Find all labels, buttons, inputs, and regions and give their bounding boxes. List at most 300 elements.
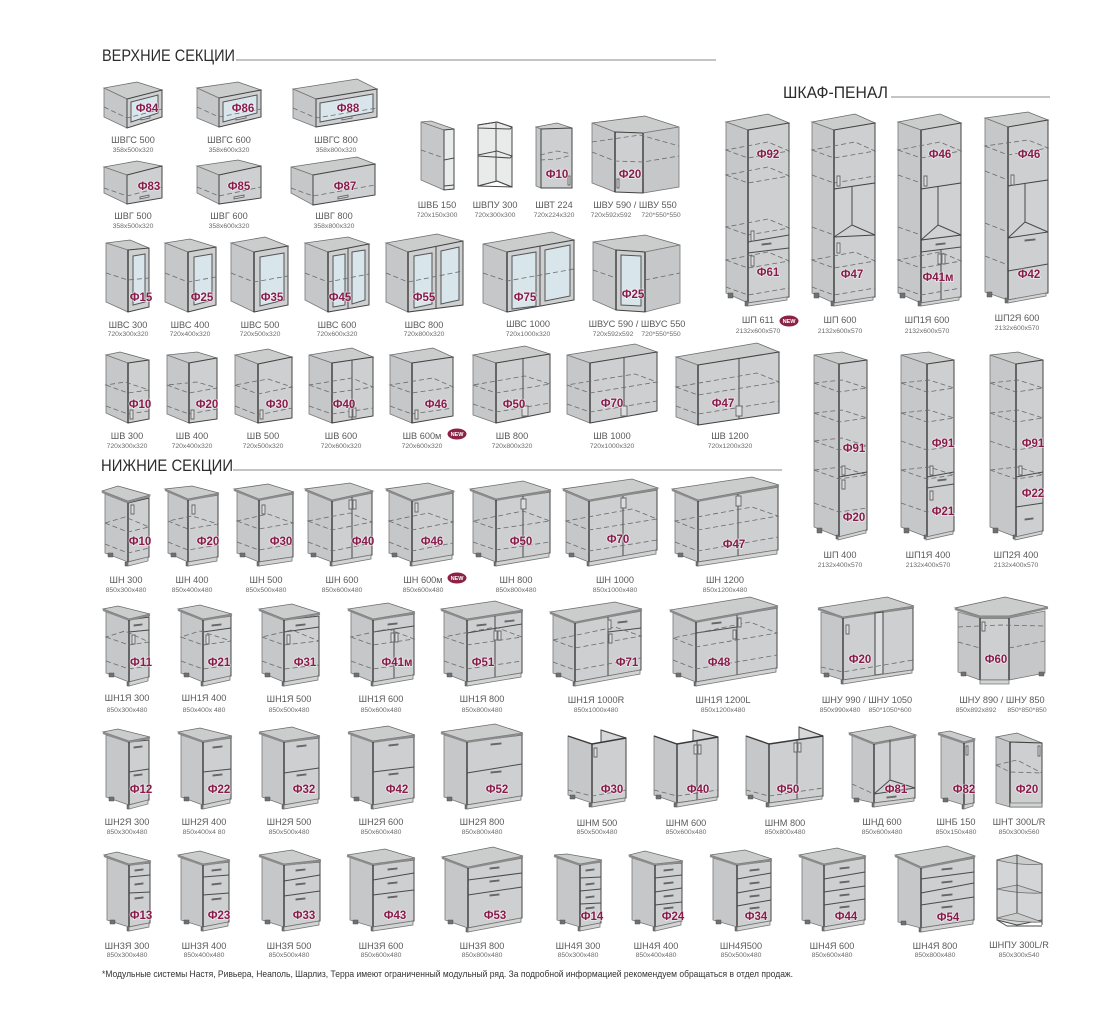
cabinet ШП2Я 600: Ф42 (1018, 269, 1040, 281)
cabinet ШН1Я 1200L: ШН1Я 1200L (696, 695, 750, 705)
cabinet ШВГС 800: ШВГС 800 (314, 135, 358, 145)
cabinet ШВС 1000: Ф75 (514, 292, 537, 304)
cabinet ШВПУ 300: ШВПУ 300 (473, 200, 517, 210)
cabinet ШВ 800: Ф50 (503, 399, 525, 411)
cabinet ШН 500: 850x500x480 (246, 587, 287, 594)
cabinet ШН 500: ШН 500 (250, 575, 282, 585)
cabinet ШВГ 600 (197, 160, 261, 230)
cabinet ШН 600м (386, 483, 454, 594)
cabinet ШН4Я 800: ШН4Я 800 (913, 941, 957, 951)
cabinet ШН1Я 600: ШН1Я 600 (359, 694, 403, 704)
cabinet ШН3Я 600: 850x600x480 (361, 952, 402, 959)
cabinet ШН2Я 300: Ф12 (130, 784, 152, 796)
cabinet ШН 600: ШН 600 (326, 575, 358, 585)
cabinet ШНПУ 300L/R: ШНПУ 300L/R (989, 940, 1049, 950)
cabinet ШП1Я 600: ШП1Я 600 (905, 315, 949, 325)
cabinet ШВ 300: ШВ 300 (111, 431, 143, 441)
cabinet ШВ 800: 720x800x320 (492, 443, 533, 450)
cabinet ШН 800: Ф50 (510, 536, 532, 548)
cabinet ШН4Я 300: Ф14 (581, 911, 604, 923)
cabinet ШВС 400: 720x400x320 (170, 331, 211, 338)
cabinet ШВУС 590 / ШВУС 550: 720*550*550 (641, 331, 681, 338)
cabinet ШНМ 600 (654, 730, 718, 836)
cabinet ШНМ 800: Ф50 (777, 784, 799, 796)
cabinet ШП 400: Ф20 (843, 512, 865, 524)
cabinet ШВ 600м (390, 348, 453, 450)
cabinet ШП 611: Ф61 (757, 267, 780, 279)
cabinet ШН2Я 300 (103, 729, 152, 836)
cabinet ШВ 500 (235, 349, 292, 450)
cabinet ШНМ 600: 850x600x480 (666, 829, 707, 836)
cabinet ШВ 600м: ШВ 600м (403, 431, 441, 441)
cabinet ШН3Я 500 (259, 850, 321, 959)
cabinet ШВГ 800 (291, 157, 375, 230)
cabinet ШВУС 590 / ШВУС 550: 720x592x592 (593, 331, 634, 338)
cabinet ШНМ 600: Ф40 (687, 784, 709, 796)
cabinet ШП1Я 400: Ф91 (932, 438, 955, 450)
cabinet ШН 600м: 850x600x480 (403, 587, 444, 594)
cabinet ШП1Я 600: Ф41м (922, 272, 954, 284)
cabinet ШВГС 600: Ф86 (232, 103, 254, 115)
cabinet ШНУ 990 / ШНУ 1050: ШНУ 990 / ШНУ 1050 (822, 695, 912, 705)
cabinet ШП2Я 400: ШП2Я 400 (994, 550, 1038, 560)
cabinet ШВС 300: 720x300x320 (108, 331, 149, 338)
cabinet ШП1Я 400 (901, 352, 955, 569)
cabinet ШН1Я 500: ШН1Я 500 (267, 694, 311, 704)
cabinet ШВ 600: Ф40 (333, 399, 355, 411)
cabinet ШВС 800: ШВС 800 (405, 320, 443, 330)
cabinet ШВС 400: ШВС 400 (171, 320, 209, 330)
cabinet ШН 800 (470, 481, 551, 594)
cabinet ШНМ 800: 850x800x480 (765, 829, 806, 836)
cabinet ШНУ 890 / ШНУ 850: 850*850*850 (1007, 707, 1047, 714)
cabinet ШП 600: ШП 600 (824, 315, 856, 325)
cabinet ШН1Я 1200L (670, 597, 778, 714)
cabinet ШВГС 600: 358x600x320 (209, 147, 250, 154)
heading: tall cabinets: ШКАФ-ПЕНАЛ (783, 83, 888, 102)
cabinet ШН1Я 600 (348, 603, 415, 714)
cabinet ШН2Я 400: ШН2Я 400 (182, 817, 226, 827)
cabinet ШН1Я 800: ШН1Я 800 (460, 694, 504, 704)
cabinet ШВ 800 (473, 346, 550, 450)
cabinet ШНУ 990 / ШНУ 1050 (818, 597, 914, 714)
cabinet ШН4Я 800 (895, 846, 975, 959)
cabinet ШН2Я 600: ШН2Я 600 (359, 817, 403, 827)
cabinet ШВ 1200: Ф47 (712, 398, 734, 410)
cabinet ШП 600 (812, 114, 875, 335)
cabinet ШВС 600: 720x600x320 (317, 331, 358, 338)
cabinet ШН 400: Ф20 (197, 536, 219, 548)
cabinet ШВУС 590 / ШВУС 550 (589, 235, 685, 338)
cabinet ШНМ 500: ШНМ 500 (577, 818, 617, 828)
cabinet ШН2Я 500: ШН2Я 500 (267, 817, 311, 827)
cabinet ШНПУ 300L/R: 850x300x540 (999, 952, 1040, 959)
cabinet ШН4Я 300: ШН4Я 300 (556, 941, 600, 951)
cabinet ШН3Я 600: ШН3Я 600 (359, 941, 403, 951)
cabinet ШНД 600: ШНД 600 (862, 817, 902, 827)
cabinet ШВГС 500: Ф84 (136, 103, 159, 115)
cabinet ШН4Я500: 850x500x480 (721, 952, 762, 959)
cabinet ШН1Я 500 (259, 604, 320, 714)
cabinet ШН1Я 300: 850x300x480 (107, 707, 148, 714)
cabinet ШН 1000: 850x1000x480 (593, 587, 638, 594)
cabinet ШП1Я 600: 2132x600x570 (905, 328, 950, 335)
cabinet ШНТ 300L/R: Ф20 (1016, 784, 1038, 796)
cabinet ШН4Я500: Ф34 (745, 911, 768, 923)
cabinet ШН1Я 400: Ф21 (208, 657, 231, 669)
cabinet ШВУ 590 / ШВУ 550: Ф20 (619, 169, 641, 181)
footnote: *Модульные системы Настя, Ривьера, Неаполь, Шарлиз, Терра имеют ограниченный модульный ряд. За подробной информацией рекомендуем обращаться в отдел продаж. (102, 969, 793, 980)
cabinet ШН2Я 800 (441, 724, 523, 836)
cabinet ШН 400 (165, 486, 219, 594)
cabinet ШН 1200: ШН 1200 (706, 575, 744, 585)
cabinet ШВУ 590 / ШВУ 550: 720*550*550 (641, 212, 681, 219)
cabinet ШН2Я 600: Ф42 (386, 784, 408, 796)
cabinet ШВГ 800: 358x800x320 (314, 223, 355, 230)
cabinet ШВС 300: ШВС 300 (109, 320, 147, 330)
cabinet ШН 500: Ф30 (270, 536, 292, 548)
cabinet ШН2Я 500: 850x500x480 (269, 829, 310, 836)
cabinet ШНПУ 300L/R (989, 855, 1049, 959)
cabinet ШП2Я 600: Ф46 (1018, 149, 1040, 161)
cabinet ШН 600м: ШН 600м (403, 575, 443, 585)
heading: upper sections: ВЕРХНИЕ СЕКЦИИ (102, 46, 235, 65)
cabinet ШВГ 600: 358x600x320 (209, 223, 250, 230)
cabinet ШН3Я 800: 850x800x480 (462, 952, 503, 959)
cabinet ШВС 400 (165, 239, 216, 338)
cabinet ШВГС 500: ШВГС 500 (111, 135, 155, 145)
cabinet ШВС 500: Ф35 (261, 292, 284, 304)
cabinet ШП 400: 2132x400x570 (818, 562, 863, 569)
cabinet ШНБ 150: Ф82 (953, 784, 975, 796)
cabinet ШН3Я 400 (178, 851, 230, 959)
panel: upper sections (102, 46, 779, 450)
cabinet ШВГС 500: 358x500x320 (113, 147, 154, 154)
cabinet ШП 400: Ф91 (843, 443, 866, 455)
cabinet ШН 400: 850x400x480 (172, 587, 213, 594)
cabinet ШВ 1000: ШВ 1000 (593, 431, 631, 441)
cabinet ШН2Я 500: Ф32 (293, 784, 315, 796)
cabinet ШВУС 590 / ШВУС 550: Ф25 (622, 289, 645, 301)
cabinet ШВТ 224: ШВТ 224 (535, 200, 573, 210)
cabinet ШВУ 590 / ШВУ 550: ШВУ 590 / ШВУ 550 (593, 200, 677, 210)
cabinet ШН2Я 400: Ф22 (208, 784, 230, 796)
badge: new: NEW (451, 576, 464, 582)
cabinet ШНМ 600: ШНМ 600 (666, 818, 706, 828)
cabinet ШВ 400: 720x400x320 (172, 443, 213, 450)
cabinet ШВ 400: ШВ 400 (176, 431, 208, 441)
cabinet ШН1Я 300: ШН1Я 300 (105, 693, 149, 703)
cabinet ШН1Я 300: Ф11 (130, 657, 153, 669)
cabinet ШН3Я 300: ШН3Я 300 (105, 941, 149, 951)
cabinet ШВС 800: Ф55 (413, 292, 436, 304)
cabinet ШВГС 800: 358x800x320 (316, 147, 357, 154)
cabinet ШН1Я 1000R: ШН1Я 1000R (568, 695, 625, 705)
cabinet ШН3Я 500: 850x500x480 (269, 952, 310, 959)
cabinet ШН3Я 300: Ф13 (130, 910, 152, 922)
cabinet ШНМ 500 (568, 730, 626, 836)
cabinet ШП 600: 2132x600x570 (818, 328, 863, 335)
cabinet ШП 611: Ф92 (757, 149, 779, 161)
cabinet ШН4Я500: ШН4Я500 (720, 941, 762, 951)
cabinet ШВГ 600: Ф85 (228, 181, 251, 193)
cabinet ШНМ 800: ШНМ 800 (765, 818, 805, 828)
cabinet ШН3Я 800 (442, 847, 523, 959)
cabinet ШН2Я 800: 850x800x480 (462, 829, 503, 836)
cabinet ШВС 800 (386, 234, 463, 338)
cabinet ШВПУ 300 (473, 122, 517, 219)
cabinet ШВГ 800: ШВГ 800 (315, 211, 353, 221)
cabinet ШНД 600: Ф81 (885, 784, 908, 796)
cabinet ШВГ 500 (104, 161, 162, 230)
cabinet ШВС 500: ШВС 500 (241, 320, 279, 330)
cabinet ШНБ 150: ШНБ 150 (937, 817, 975, 827)
cabinet ШВ 500: ШВ 500 (247, 431, 279, 441)
cabinet ШП1Я 400: ШП1Я 400 (906, 550, 950, 560)
cabinet ШНУ 990 / ШНУ 1050: 850*1050*600 (868, 707, 912, 714)
panel: tall cabinets (726, 83, 1050, 569)
cabinet ШН 1200: 850x1200x480 (703, 587, 748, 594)
cabinet ШН 600: 850x600x480 (322, 587, 363, 594)
cabinet ШВ 600: ШВ 600 (325, 431, 357, 441)
cabinet ШВГС 500 (104, 82, 162, 154)
cabinet ШН 300: Ф10 (129, 536, 151, 548)
cabinet ШВПУ 300: 720x300x300 (475, 212, 516, 219)
cabinet ШН4Я 400 (629, 851, 685, 959)
cabinet ШВС 500 (231, 237, 288, 338)
cabinet ШН 400: ШН 400 (176, 575, 208, 585)
cabinet ШН3Я 300: 850x300x480 (107, 952, 148, 959)
cabinet ШВ 500: Ф30 (266, 399, 288, 411)
cabinet ШВС 600 (305, 237, 369, 338)
cabinet ШВ 1200 (676, 343, 779, 450)
cabinet ШП2Я 600: ШП2Я 600 (995, 313, 1039, 323)
cabinet ШП 611 (726, 114, 789, 335)
cabinet ШНУ 890 / ШНУ 850: Ф60 (985, 654, 1007, 666)
cabinet ШВГС 800: Ф88 (337, 103, 360, 115)
cabinet ШВБ 150: 720x150x300 (417, 212, 458, 219)
cabinet ШН1Я 800: 850x800x480 (462, 707, 503, 714)
cabinet ШП2Я 400: 2132x400x570 (994, 562, 1039, 569)
cabinet ШН4Я 800: Ф54 (937, 912, 960, 924)
cabinet ШВ 300 (106, 352, 151, 450)
badge: new: NEW (783, 319, 796, 325)
cabinet ШН4Я 300 (554, 854, 604, 959)
cabinet ШП1Я 400: 2132x400x570 (906, 562, 951, 569)
cabinet ШВ 600м: Ф46 (425, 399, 447, 411)
cabinet ШВ 1000 (567, 344, 657, 450)
cabinet ШН 1200 (672, 477, 779, 594)
cabinet ШВГС 800 (293, 79, 377, 154)
cabinet ШН1Я 400: 850x400x 480 (183, 707, 226, 714)
cabinet ШВ 400 (167, 352, 218, 450)
cabinet ШН1Я 1000R (550, 602, 642, 714)
cabinet ШН4Я 300: 850x300x480 (558, 952, 599, 959)
cabinet ШН4Я 800: 850x800x480 (915, 952, 956, 959)
cabinet ШВ 600: 720x600x320 (321, 443, 362, 450)
cabinet ШВГ 500: Ф83 (138, 181, 160, 193)
cabinet ШП 611: ШП 611 (742, 315, 774, 325)
cabinet ШН3Я 400: 850x400x480 (184, 952, 225, 959)
cabinet ШП2Я 600 (985, 112, 1048, 332)
cabinet ШН3Я 500: Ф33 (293, 910, 315, 922)
cabinet ШНУ 990 / ШНУ 1050: Ф20 (849, 654, 871, 666)
cabinet ШВТ 224 (534, 123, 575, 219)
cabinet ШНБ 150: 850x150x480 (936, 829, 977, 836)
cabinet ШП2Я 400: Ф22 (1022, 488, 1044, 500)
cabinet ШН1Я 400: ШН1Я 400 (182, 693, 226, 703)
badge: new (448, 428, 466, 440)
cabinet ШП2Я 400 (990, 352, 1045, 569)
cabinet ШВГ 800: Ф87 (334, 181, 356, 193)
cabinet ШВУ 590 / ШВУ 550 (591, 116, 681, 219)
cabinet ШВУ 590 / ШВУ 550: 720x592x592 (591, 212, 632, 219)
cabinet ШВГ 500: 358x500x320 (113, 223, 154, 230)
cabinet ШН 300: 850x300x480 (106, 587, 147, 594)
cabinet ШН1Я 1200L: 850x1200x480 (701, 707, 746, 714)
cabinet ШВС 400: Ф25 (191, 292, 214, 304)
badge: new (780, 316, 798, 326)
cabinet ШНУ 890 / ШНУ 850: 850x892x892 (956, 707, 997, 714)
cabinet ШН2Я 600 (348, 726, 415, 836)
cabinet ШН4Я 400: 850x400x480 (636, 952, 677, 959)
badge: new: NEW (451, 432, 464, 438)
cabinet ШН2Я 800: Ф52 (486, 784, 508, 796)
cabinet ШНТ 300L/R (993, 733, 1046, 836)
cabinet ШНМ 800 (746, 727, 823, 836)
cabinet ШНД 600 (849, 726, 916, 836)
cabinet ШН4Я 600: Ф44 (835, 911, 858, 923)
cabinet ШП 400: ШП 400 (824, 550, 856, 560)
cabinet ШН 600: Ф40 (352, 536, 374, 548)
cabinet ШН1Я 800 (441, 601, 523, 714)
cabinet ШН3Я 600: Ф43 (384, 910, 406, 922)
cabinet ШВГ 500: ШВГ 500 (114, 211, 152, 221)
cabinet ШВ 1200: ШВ 1200 (711, 431, 749, 441)
cabinet ШН1Я 300 (103, 606, 153, 714)
cabinet ШНУ 990 / ШНУ 1050: 850x990x480 (820, 707, 861, 714)
cabinet ШН4Я 600: ШН4Я 600 (810, 941, 854, 951)
cabinet ШН 1200: Ф47 (723, 539, 745, 551)
cabinet ШНБ 150 (936, 731, 977, 836)
cabinet ШВС 300 (106, 240, 153, 338)
cabinet ШВГС 600: ШВГС 600 (207, 135, 251, 145)
cabinet ШНД 600: 850x600x480 (862, 829, 903, 836)
cabinet ШВ 500: 720x500x320 (243, 443, 284, 450)
cabinet ШН1Я 500: 850x500x480 (269, 707, 310, 714)
cabinet ШП2Я 400: Ф91 (1022, 438, 1045, 450)
cabinet ШН3Я 400: Ф23 (208, 910, 230, 922)
cabinet ШВ 1000: Ф70 (601, 398, 623, 410)
cabinet ШН2Я 400 (178, 728, 232, 836)
cabinet ШВ 300: 720x300x320 (107, 443, 148, 450)
cabinet ШН3Я 800: ШН3Я 800 (460, 941, 504, 951)
cabinet ШВ 800: ШВ 800 (496, 431, 528, 441)
cabinet ШН1Я 800: Ф51 (472, 657, 495, 669)
cabinet ШВБ 150 (417, 121, 458, 219)
cabinet ШП 600: Ф47 (841, 269, 863, 281)
cabinet ШН 600 (305, 483, 374, 594)
cabinet ШН 300: ШН 300 (110, 575, 142, 585)
cabinet ШН3Я 600 (347, 849, 415, 959)
cabinet ШП 611: 2132x600x570 (736, 328, 781, 335)
cabinet ШВС 500: 720x500x320 (240, 331, 281, 338)
cabinet ШВГ 600: ШВГ 600 (210, 211, 248, 221)
cabinet ШВГС 600 (197, 82, 261, 154)
cabinet ШН4Я 600 (799, 848, 866, 959)
cabinet ШВС 600: Ф45 (329, 292, 352, 304)
cabinet ШВ 400: Ф20 (196, 399, 218, 411)
cabinet ШВС 1000: 720x1000x320 (506, 331, 551, 338)
cabinet ШН1Я 1200L: Ф48 (708, 657, 731, 669)
cabinet ШВУС 590 / ШВУС 550: ШВУС 590 / ШВУС 550 (589, 319, 685, 329)
badge: new (448, 572, 466, 584)
cabinet ШП2Я 600: 2132x600x570 (995, 325, 1040, 332)
cabinet ШН1Я 1000R: Ф71 (616, 657, 639, 669)
cabinet ШНМ 500: Ф30 (601, 784, 623, 796)
cabinet ШП1Я 600: Ф46 (929, 149, 951, 161)
cabinet ШН 600м: Ф46 (421, 536, 443, 548)
cabinet ШН 1000 (563, 479, 658, 594)
cabinet ШВТ 224: 720x224x320 (534, 212, 575, 219)
cabinet ШН1Я 600: 850x600x480 (361, 707, 402, 714)
cabinet ШН1Я 600: Ф41м (381, 657, 413, 669)
cabinet ШП1Я 400: Ф21 (932, 506, 955, 518)
cabinet ШН4Я 400: ШН4Я 400 (634, 941, 678, 951)
cabinet ШВС 600: ШВС 600 (318, 320, 356, 330)
cabinet ШН 1000: Ф70 (607, 534, 629, 546)
cabinet ШН4Я 600: 850x600x480 (812, 952, 853, 959)
cabinet ШН4Я 400: Ф24 (662, 911, 685, 923)
cabinet ШН3Я 500: ШН3Я 500 (267, 941, 311, 951)
cabinet ШН3Я 400: ШН3Я 400 (182, 941, 226, 951)
cabinet ШН2Я 600: 850x600x480 (361, 829, 402, 836)
cabinet ШН 300 (102, 486, 151, 594)
cabinet ШН 800: ШН 800 (500, 575, 532, 585)
cabinet ШН2Я 500 (259, 727, 320, 836)
cabinet ШН1Я 400 (178, 605, 232, 714)
cabinet ШВТ 224: Ф10 (546, 169, 568, 181)
cabinet ШН2Я 800: ШН2Я 800 (460, 817, 504, 827)
cabinet ШН2Я 300: 850x300x480 (107, 829, 148, 836)
cabinet ШН 1000: ШН 1000 (596, 575, 634, 585)
cabinet ШН3Я 800: Ф53 (484, 910, 506, 922)
cabinet ШВС 1000 (483, 232, 574, 338)
heading: lower sections: НИЖНИЕ СЕКЦИИ (101, 456, 233, 475)
cabinet ШВС 1000: ШВС 1000 (506, 319, 550, 329)
cabinet ШП 400 (814, 352, 867, 569)
cabinet ШНТ 300L/R: 850x300x560 (999, 829, 1040, 836)
cabinet ШН2Я 400: 850x400x4 80 (183, 829, 226, 836)
cabinet ШНМ 500: 850x500x480 (577, 829, 618, 836)
cabinet ШНУ 890 / ШНУ 850 (955, 597, 1048, 714)
cabinet ШВБ 150: ШВБ 150 (418, 200, 456, 210)
cabinet ШВС 300: Ф15 (130, 292, 153, 304)
cabinet ШН2Я 300: ШН2Я 300 (105, 817, 149, 827)
cabinet ШН1Я 1000R: 850x1000x480 (574, 707, 619, 714)
cabinet ШВ 300: Ф10 (129, 399, 151, 411)
cabinet ШНТ 300L/R: ШНТ 300L/R (993, 817, 1046, 827)
cabinet ШН 800: 850x800x480 (496, 587, 537, 594)
cabinet ШВ 600 (309, 348, 373, 450)
cabinet ШВ 600м: 720x600x320 (402, 443, 443, 450)
cabinet ШН1Я 500: Ф31 (294, 657, 317, 669)
cabinet ШН3Я 300 (104, 852, 152, 959)
cabinet ШНУ 890 / ШНУ 850: ШНУ 890 / ШНУ 850 (959, 695, 1045, 705)
cabinet ШВ 1000: 720x1000x320 (590, 443, 635, 450)
cabinet ШН4Я500 (710, 850, 772, 959)
cabinet ШП1Я 600 (898, 114, 961, 335)
